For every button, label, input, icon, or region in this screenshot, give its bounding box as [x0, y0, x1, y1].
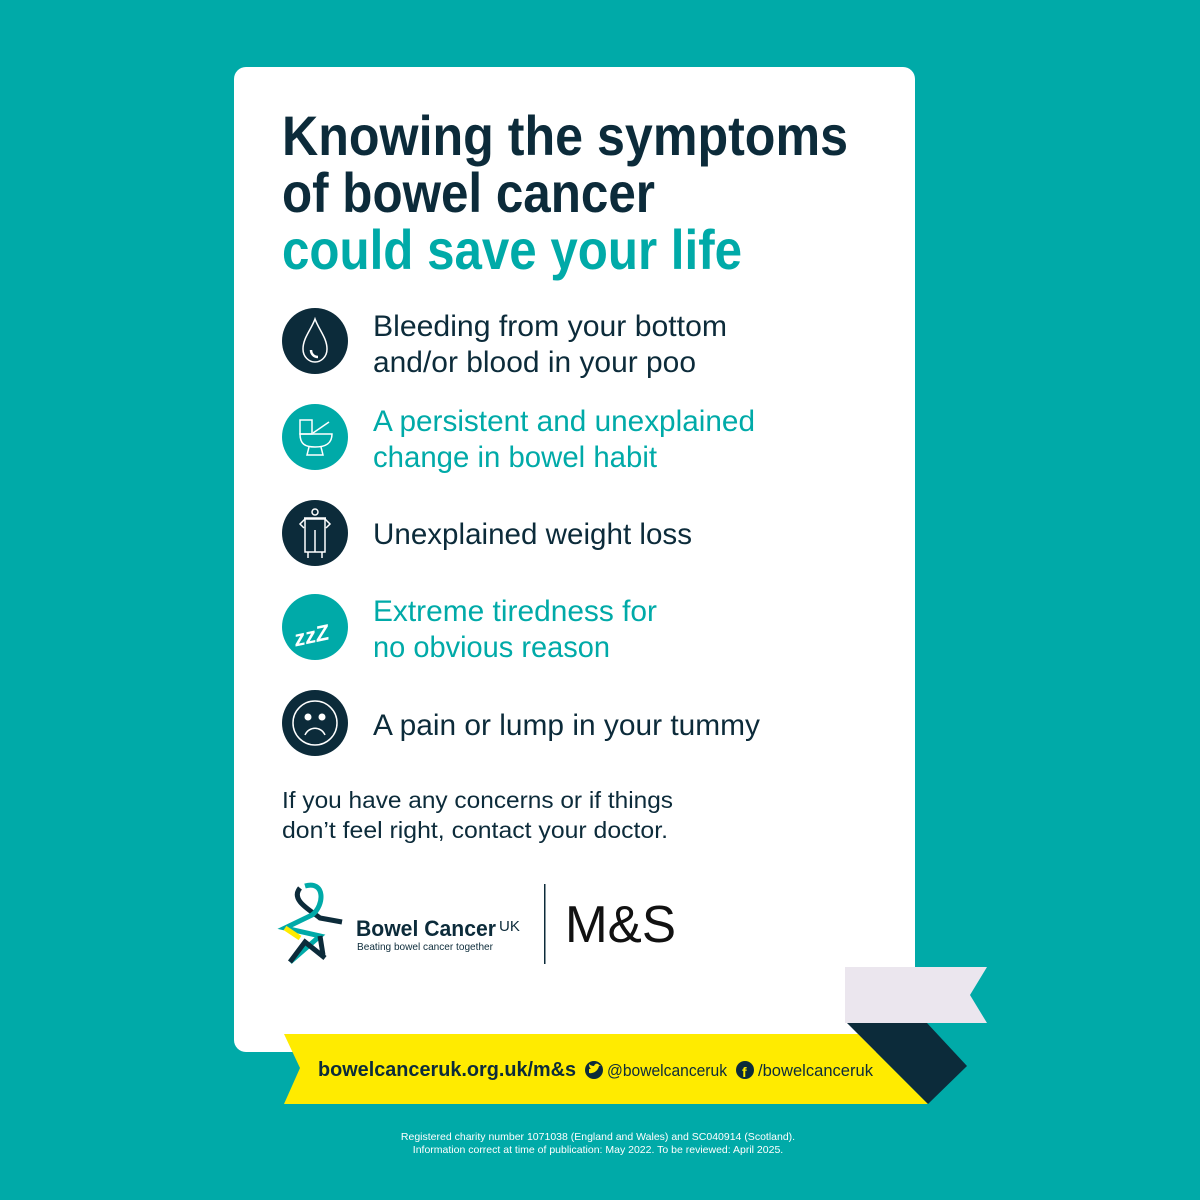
title: of bowel cancer — [282, 161, 655, 224]
icon: zzz: zzZ — [290, 619, 333, 652]
advice text — [282, 787, 673, 843]
icon: facebook: f — [742, 1064, 747, 1080]
logo: Bowel Cancer UK: UK — [499, 918, 520, 935]
yellow banner: bowelcanceruk.org.uk/m&s — [318, 1059, 576, 1081]
yellow banner: /bowelcanceruk — [758, 1061, 873, 1080]
icon: blood drop — [282, 308, 348, 374]
symptom 1 text: Bleeding from your bottom — [373, 310, 727, 343]
icon: sad face — [282, 690, 348, 756]
icon: zzz — [282, 594, 348, 660]
logo: Bowel Cancer UK: Beating bowel cancer together — [357, 941, 493, 953]
yellow banner: @bowelcanceruk — [607, 1061, 727, 1080]
legal text: Information correct at time of publication: May 2022. To be reviewed: April 2025. — [413, 1144, 783, 1156]
symptom 2 text: A persistent and unexplained — [373, 405, 755, 438]
advice text: don’t feel right, contact your doctor. — [282, 817, 668, 843]
symptom 4 text — [373, 595, 657, 664]
title — [282, 104, 848, 281]
title: could save your life — [282, 218, 742, 281]
symptom 2 text — [373, 405, 755, 474]
icon: weight loss person — [282, 500, 348, 566]
symptom list — [282, 308, 760, 756]
ribbon: dark fold — [847, 1023, 967, 1104]
icon: twitter — [585, 1061, 603, 1079]
divider — [544, 884, 546, 964]
symptom 3 text: Unexplained weight loss — [373, 518, 692, 551]
logo: Bowel Cancer UK — [285, 885, 520, 962]
symptom 1 text: and/or blood in your poo — [373, 346, 696, 379]
icon: facebook — [736, 1061, 754, 1080]
symptom 2 text: change in bowel habit — [373, 441, 658, 474]
legal text: Registered charity number 1071038 (England and Wales) and SC040914 (Scotland). — [401, 1131, 795, 1143]
logo: Bowel Cancer UK: Bowel Cancer — [356, 916, 496, 941]
advice text: If you have any concerns or if things — [282, 787, 673, 813]
symptom 5 text: A pain or lump in your tummy — [373, 709, 760, 742]
symptom 4 text: Extreme tiredness for — [373, 595, 657, 628]
symptom 1 text — [373, 310, 727, 379]
icon: toilet — [282, 404, 348, 470]
legal text — [401, 1131, 795, 1156]
white card — [234, 67, 915, 1052]
logo: M&S: M&S — [565, 896, 676, 954]
yellow banner — [284, 1034, 928, 1104]
symptom 4 text: no obvious reason — [373, 631, 610, 664]
ribbon: grey flag — [845, 967, 987, 1023]
title: Knowing the symptoms — [282, 104, 848, 167]
